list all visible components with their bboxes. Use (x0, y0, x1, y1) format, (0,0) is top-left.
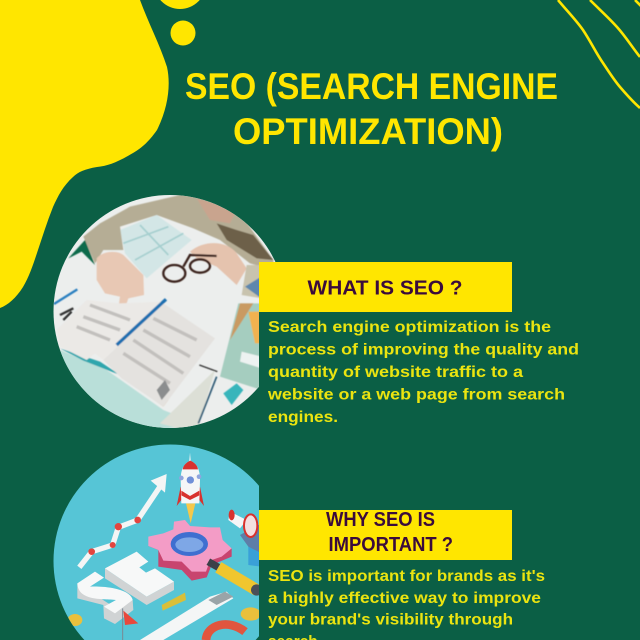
sub-element: grid sheet (120, 215, 192, 278)
sub-element: megaphone (228, 510, 262, 567)
body text: what is SEO (267, 319, 579, 426)
sub-element: red flag (123, 608, 138, 640)
sub-element: green folder (220, 303, 262, 390)
green mask beside photo and text (259, 262, 319, 640)
body text: why SEO is important (268, 568, 545, 640)
title: OPTIMIZATION) (233, 111, 503, 152)
body text: why SEO is important: a highly effective way to improve (268, 590, 541, 607)
sub-element: rocket (177, 453, 204, 523)
heading box: why SEO is important: IMPORTANT ? (328, 534, 453, 556)
sub-element: doodle mark (60, 308, 73, 320)
sub-element: magnifier handle (208, 562, 262, 596)
decorative curved lines top right (558, 0, 640, 108)
decorative yellow circle large (154, 0, 206, 9)
sub-element: blue pen (117, 299, 166, 345)
sub-element: lined paper under book (60, 350, 197, 433)
sub-element: chain link (162, 593, 186, 611)
sub-element: search bar (140, 592, 233, 640)
body text: what is SEO: quantity of website traffic to a (268, 364, 523, 381)
sub-element: red magnet (206, 624, 245, 640)
sub-element: SEO block letters (77, 552, 174, 624)
title (185, 66, 558, 152)
sub-element: green marker (68, 240, 95, 265)
sub-element: left hand (96, 252, 144, 304)
body text: what is SEO: website or a web page from search (267, 386, 565, 404)
sub-element: gear (148, 520, 232, 581)
title: SEO (SEARCH ENGINE (185, 66, 558, 107)
sub-element: dark shirt shadow (217, 223, 273, 260)
photo: open book and glasses on desk (54, 195, 276, 428)
yellow blob top left (0, 0, 169, 308)
body text: what is SEO: engines. (268, 409, 338, 426)
sub-element: rising arrow (79, 474, 167, 567)
heading box: what is SEO: WHAT IS SEO ? (308, 278, 462, 300)
sub-element: open book (60, 348, 120, 375)
heading box: what is SEO (259, 262, 512, 312)
body text: why SEO is important: your brand's visibility through (268, 612, 513, 628)
decorative yellow circle small (170, 20, 196, 46)
body text: why SEO is important: SEO is important for brands as it's (268, 568, 545, 585)
sub-element: beige sleeves (83, 195, 273, 270)
heading box: why SEO is important: WHY SEO IS (326, 509, 435, 531)
sub-element: face (197, 198, 237, 223)
illustration: SEO gear, rocket and magnifier (54, 444, 259, 640)
body text: what is SEO: Search engine optimization is the (268, 319, 551, 336)
sub-element: gold coins (68, 607, 261, 626)
heading box: why SEO is important (259, 509, 512, 560)
body text: what is SEO: process of improving the quality and (268, 342, 579, 358)
sub-element: cuff (242, 265, 262, 298)
sub-element: glasses (163, 255, 217, 282)
sub-element: right hand (190, 243, 247, 285)
